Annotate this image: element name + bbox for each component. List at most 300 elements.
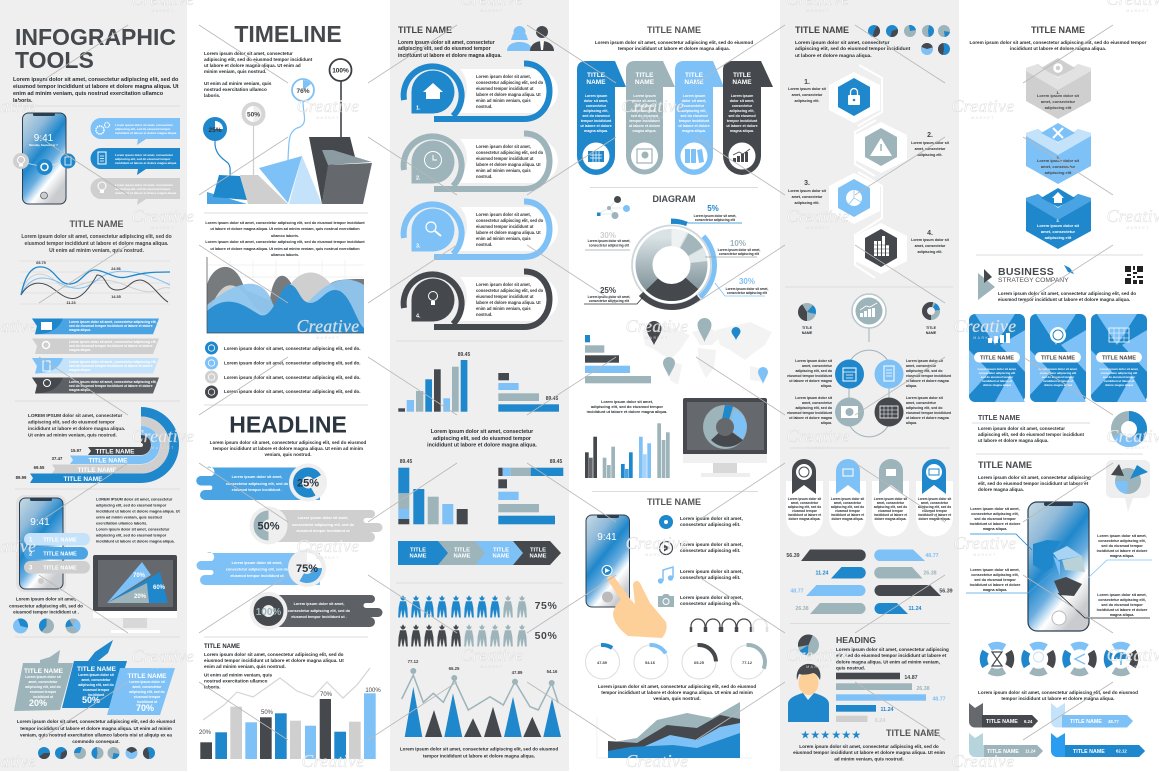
watermark text: MARKET — [806, 9, 830, 13]
ribbon list: Lorem ipsum dolor sit amet, consectetur adipiscing elit, — [69, 380, 157, 384]
watermark text: Creative — [626, 751, 688, 771]
phone with 3D pie and callouts: sed do eiusmod tempor — [1101, 603, 1143, 607]
phone with numbered menu: 2 — [29, 552, 33, 558]
business cards: Lorem ipsum dolor sit amet, — [1100, 367, 1139, 371]
vertical tab cards: dolor sit amet, — [682, 99, 706, 103]
phone with 3D pie and callouts — [966, 502, 1152, 631]
splash bars with percent donuts: eiusmod tempor incididunt ut — [296, 529, 350, 533]
icons: people — [507, 26, 554, 51]
isometric box 3 — [1026, 188, 1091, 249]
text block column 6: Lorem ipsum dolor sit amet, consectetur adipiscing elit, sed do eiusmod tempor — [970, 40, 1147, 45]
numbered step 4: nostrud. — [476, 312, 492, 317]
numbered step 2: labore et dolore magna aliqua. Ut — [476, 162, 541, 167]
numbered step 2: nostrud. — [476, 174, 492, 179]
business cards: TITLE NAME — [1102, 356, 1136, 362]
numbered step 3: eiusmod tempor incididunt ut — [476, 224, 534, 229]
network of icon circles: TITLE — [802, 326, 813, 330]
vertical tab cards: TITLE — [733, 72, 752, 79]
phone with 3D pie and callouts: incididunt ut labore et dolore — [1097, 549, 1147, 553]
phone with app icons — [13, 113, 76, 204]
hexagon steps: adipiscing elit. — [795, 99, 819, 103]
world map with pins — [642, 318, 772, 385]
text block column 4: tempor incididunt ut labore et dolore magna aliqua. — [618, 46, 730, 51]
network of icon circles: amet, consectetur — [802, 401, 833, 405]
watermark text: MARKET — [151, 9, 175, 13]
isometric box 2 — [1026, 123, 1091, 184]
trapezoid comparison bars: 56.39 — [939, 588, 953, 594]
origami banners: incididunt ut — [33, 695, 54, 699]
watermark text: Creative — [302, 751, 364, 771]
title name with text: TITLE NAME — [978, 460, 1032, 470]
chevron process arrow: NAME — [492, 554, 510, 560]
phone with 3D pie and callouts: incididunt ut labore et dolore — [970, 583, 1020, 587]
numbered step 4: consectetur adipiscing elit, sed do — [476, 288, 544, 293]
skill bars: 26.38 — [916, 686, 930, 692]
donut diagram with labels: consectetur adipiscing elit — [719, 252, 760, 256]
origami banners: 50% — [82, 695, 100, 705]
speech bubbles with text: Lorem ipsum dolor sit amet, consectetur — [115, 183, 174, 187]
concentric arc bars: 69.55 — [34, 465, 45, 470]
speech bubbles with text: Lorem ipsum dolor sit amet, consectetur — [115, 123, 174, 127]
phone with 3D pie and callouts: consectetur adipiscing elit, — [1098, 598, 1146, 602]
watermark text: MARKET — [151, 666, 175, 670]
business cards: consectetur adipiscing elit — [1101, 371, 1137, 375]
trapezoid comparison bars: 26.38 — [923, 570, 937, 576]
phone with 3D pie and callouts: magna aliqua. — [983, 527, 1007, 531]
watermark text: Creative — [132, 646, 194, 666]
watermark text: Creative — [952, 751, 1014, 771]
stars: ★ — [842, 730, 851, 741]
business logo and heading: Lorem ipsum dolor sit amet, consectetur adipiscing elit, sed do — [998, 291, 1136, 296]
business cards: dolore magna aliqua — [983, 383, 1011, 387]
numbered step 3: enim ad minim veniam, quis — [476, 236, 531, 241]
bookmark cards: eiusmod tempor — [792, 509, 818, 513]
vertical tab cards: adipiscing elit, — [730, 109, 754, 113]
numbered step 4: 4. — [416, 314, 421, 320]
intro text: laboris. — [13, 98, 33, 104]
business cards: dolore magna aliqua — [1105, 383, 1133, 387]
trapezoid comparison bars: 11.24 — [816, 570, 829, 576]
watermark text: MARKET — [806, 665, 830, 669]
phone with numbered menu — [16, 495, 90, 592]
title name with text and donut: Lorem ipsum dolor sit amet, consectetur — [978, 426, 1065, 431]
bookmark cards: incididunt ut labore et — [788, 513, 822, 517]
stacked bar chart — [498, 459, 563, 524]
phone with 3D pie and callouts: incididunt ut labore et dolore — [1097, 608, 1147, 612]
heading block with pie: HEADING — [836, 635, 876, 645]
centered text under gauges: tempor incididunt ut labore et dolore magna aliqua. Ut enim ad minim — [601, 690, 753, 695]
heading and text: bar chart: laboris. — [204, 684, 221, 690]
concentric arc bars: 15.97 — [71, 448, 82, 453]
watermark text: MARKET — [806, 226, 830, 230]
vertical tab cards: sed do eiusmod — [680, 114, 708, 118]
bar chart with trend line — [199, 668, 381, 759]
phone with 3D pie and callouts: incididunt ut labore et dolore — [970, 522, 1020, 526]
numbered step 1: 1. — [416, 106, 421, 112]
vertical tab cards: Lorem ipsum — [585, 94, 607, 98]
caption under phone: consectetur adipiscing elit, sed do — [9, 604, 83, 608]
vertical tab cards: tempor incididunt — [679, 119, 710, 123]
donut diagram with labels: 25% — [600, 286, 616, 295]
title: Timeline: TIMELINE — [234, 21, 342, 47]
watermark text: MARKET — [316, 336, 340, 340]
ribbon list: magna aliqua. — [69, 328, 91, 332]
business cards: TITLE NAME — [1041, 356, 1075, 362]
media icon list: consectetur adipiscing elit. — [680, 601, 740, 606]
stacked column chart — [398, 459, 468, 524]
intro text: eiusmod tempor incididunt ut labore et dolore magna aliqua. Ut — [13, 84, 179, 90]
splash bars with percent donuts: eiusmod tempor incididunt ut . — [291, 615, 347, 619]
hexagon steps: 2. — [927, 132, 933, 139]
network of icon circles: eiusmod tempor incididunt — [787, 374, 833, 378]
text block column 3: adipiscing elit, sed do eiusmod tempor — [398, 46, 491, 52]
business cards: consectetur adipiscing elit — [979, 371, 1015, 375]
business cards: incididunt ut labore et — [1043, 379, 1073, 383]
monitor with pyramid chart: 60% — [153, 585, 166, 591]
heading: title name column 5: TITLE NAME — [795, 25, 849, 35]
watermark text: Creative — [787, 206, 849, 226]
hexagon steps: Lorem ipsum dolor sit — [911, 238, 950, 242]
chevron process arrow — [398, 541, 561, 565]
origami banners: adipiscing elit, sed do — [25, 685, 61, 689]
bookmark cards: Lorem ipsum dolor sit — [788, 497, 822, 501]
timeline text: laboris. — [204, 93, 220, 98]
hexagon steps: adipiscing elit. — [795, 201, 819, 205]
tag labels: TITLE NAME — [1073, 749, 1105, 755]
watermark text: Creative — [952, 96, 1014, 116]
title: Infographic Tools: TOOLS — [15, 47, 94, 73]
vertical tab cards: Lorem ipsum — [633, 94, 656, 98]
chevron process arrow: NAME — [409, 554, 427, 560]
people pictogram 75 percent: 75% — [535, 600, 557, 612]
origami banners: incididunt — [88, 693, 105, 697]
bar chart with trend line: 100% — [365, 688, 381, 694]
watermark text: MARKET — [480, 9, 504, 13]
bookmark cards: amet, consectetur — [791, 501, 819, 505]
network of icon circles: Lorem ipsum dolor sit — [795, 359, 833, 363]
horizontal bar chart — [498, 373, 559, 412]
watermark text: Creative — [954, 533, 1016, 553]
numbered step 3: 3. — [416, 244, 421, 250]
phone with numbered menu: TITLE NAME — [43, 552, 77, 558]
chevron process arrow: TITLE — [493, 548, 509, 554]
phone with 3D pie and callouts: Lorem ipsum dolor sit amet, — [970, 507, 1020, 511]
watermark text: Creative — [297, 96, 359, 116]
line chart: 11.23 — [66, 301, 76, 305]
numbered step 1: consectetur adipiscing elit, sed do — [476, 80, 544, 85]
vertical tab cards: consectetur — [634, 104, 655, 108]
vertical tab cards: adipiscing elit, — [682, 109, 706, 113]
mountain chart with pins: 50% — [247, 112, 260, 118]
watermark text: MARKET — [806, 446, 830, 450]
centered text column 3: adipiscing elit, sed do eiusmod tempor — [433, 436, 531, 442]
donut diagram with labels: 5% — [707, 204, 719, 213]
centered text under gauges: veniam, quis nostrud. — [653, 696, 701, 701]
triangle chart with trend line: 54.16 — [547, 669, 558, 674]
grouped bar chart — [585, 423, 670, 478]
stars: ★ — [852, 730, 861, 741]
numbered step 1 — [404, 63, 558, 119]
origami banners: amet, consectetur — [81, 678, 111, 682]
isometric box 3: adipiscing elit — [1045, 235, 1072, 240]
media icon list: consectetur adipiscing elit. — [680, 575, 740, 580]
text block beside phone: LOREM IPSUM dolor sit amet, consectetur — [96, 498, 173, 502]
vertical tab cards: TITLE — [587, 72, 606, 79]
line chart: 14.35 — [111, 295, 121, 299]
stacked area chart — [597, 702, 752, 758]
concentric arc bars: 89.99 — [16, 475, 27, 480]
centered text above tags: tempor incididunt ut labore et dolore magna aliqua. — [1001, 696, 1115, 701]
small pies row — [13, 618, 80, 634]
chevron process arrow: TITLE — [454, 548, 470, 554]
vertical tab cards: tempor incididunt — [629, 119, 660, 123]
numbered step 4 — [404, 271, 558, 327]
business cards: incididunt ut labore et — [982, 379, 1012, 383]
caption under phone: eiusmod tempor incididunt ut . — [13, 610, 79, 614]
text block column 5: Lorem ipsum dolor sit amet, consectetur — [795, 40, 890, 46]
speech bubbles with text: incididunt ut labore et dolore magna aliqua — [115, 131, 177, 135]
timeline text: Ut enim ad minim veniam, quis — [204, 81, 272, 86]
line chart: 65.75 — [36, 261, 46, 265]
molecule dots — [597, 196, 630, 219]
business cards: dolore magna aliqua — [1044, 383, 1072, 387]
watermark text: MARKET — [645, 553, 669, 557]
splash bars with percent donuts: Lorem ipsum dolor sit amet, — [232, 561, 282, 565]
legend list: Lorem ipsum dolor sit amet, consectetur adipiscing elit, sed do. — [224, 360, 361, 366]
phone with numbered menu: TITLE NAME — [43, 566, 77, 572]
centered text under gauges: Lorem ipsum dolor sit amet, consectetur adipiscing elit, sed do eiusmod — [598, 684, 756, 689]
text block above arc: LOREM IPSUM dolor sit amet, consectetur — [28, 413, 122, 418]
phone with hand — [586, 515, 667, 638]
origami banners: 70% — [136, 703, 154, 713]
origami banners: Lorem ipsum dolor sit — [25, 675, 62, 679]
four-segment icon circles — [978, 640, 1140, 678]
hexagon steps: Lorem ipsum dolor sit — [788, 87, 827, 91]
skill bars: 6.24 — [875, 718, 885, 724]
stars: ★ — [811, 730, 820, 741]
isometric box 2: Lorem ipsum dolor sit — [1037, 158, 1080, 163]
speech bubbles with text: adipiscing elit, sed do eiusmod tempor — [115, 187, 171, 191]
network of icon circles: TITLE — [926, 326, 937, 330]
centered small text above grouped bars: adipiscing elit, sed do eiusmod tempor — [591, 404, 663, 409]
watermark text: MARKET — [973, 336, 997, 340]
text block column 5: adipiscing elit, sed do eiusmod tempor incididunt — [795, 46, 911, 52]
numbered step 2: Lorem ipsum dolor sit amet, — [476, 144, 531, 149]
intro text: enim ad minim veniam, quis nostrud exercitation ullamco — [13, 91, 164, 97]
text block beside phone: exercitation ullamco laboris. — [96, 522, 147, 526]
phone with 3D pie and callouts: consectetur adipiscing elit, — [1098, 539, 1146, 543]
footer text column 1: tempor incididunt ut labore et dolore magna aliqua. Ut enim ad minim — [20, 726, 172, 731]
vertical tab cards: Lorem ipsum — [683, 94, 705, 98]
skill bars — [836, 673, 946, 724]
centered small text above grouped bars: incididunt ut labore et dolore magna aliqua. — [587, 409, 667, 414]
text block beside phone: adipiscing elit, sed do eiusmod tempor — [96, 534, 167, 538]
watermark text: MARKET — [971, 116, 995, 120]
hexagon steps: adipiscing elit. — [918, 153, 942, 157]
footer text column 1: Lorem ipsum dolor sit amet, consectetur adipiscing elit, sed do eiusmod — [17, 719, 175, 724]
network of icon circles: Lorem ipsum dolor sit — [795, 396, 833, 400]
bookmark cards: eiusmod tempor — [878, 509, 904, 513]
panel: gray column 2 background — [390, 0, 569, 771]
watermark text: MARKET — [151, 226, 175, 230]
concentric arc bars: TITLE NAME — [96, 448, 135, 456]
network of icon circles: ut labore et dolore magna — [906, 379, 949, 383]
isometric box 2: amet, consectetur — [1041, 164, 1076, 169]
donut diagram with labels: Lorem ipsum dolor sit amet, — [726, 287, 768, 291]
concentric arc bars: TITLE NAME — [64, 476, 103, 483]
phone with hand: 9:41 — [597, 532, 617, 543]
panel: gray column 1 background — [0, 0, 187, 771]
heading: title name: TITLE NAME — [70, 219, 124, 229]
numbered step 2: enim ad minim veniam, quis — [476, 168, 531, 173]
column chart: 89.45 — [458, 352, 470, 358]
hexagon steps: Lorem ipsum dolor sit — [788, 189, 827, 193]
ribbon list: sed do eiusmod tempor incididunt ut labore et dolore — [69, 364, 153, 368]
numbered step 4: labore et dolore magna aliqua. Ut — [476, 300, 541, 305]
donut diagram with labels: consectetur adipiscing elit — [589, 244, 630, 248]
splash bars with percent donuts: consectetur adipiscing elit, sed do — [292, 523, 355, 527]
network of icon circles: aliqua. — [906, 421, 917, 425]
vertical tab cards: tempor incididunt — [581, 119, 612, 123]
vertical tab cards: sed do eiusmod — [631, 114, 658, 118]
network of icon circles: ut labore et dolore magna — [789, 416, 832, 420]
business cards: sed do eiusmod tempor — [1042, 375, 1075, 379]
heading: title name: TITLE NAME — [647, 497, 701, 507]
vertical tab cards: NAME — [586, 79, 606, 86]
concentric arc bars: 37.47 — [52, 456, 63, 461]
heading: diagram: DIAGRAM — [652, 194, 696, 204]
timeline text: adipiscing elit, sed do eiusmod tempor incididunt — [204, 57, 313, 62]
headline text: tempor incididunt ut labore et dolore magna aliqua. Ut enim ad minim — [213, 446, 363, 451]
speech bubbles with text — [91, 118, 180, 205]
origami banners: adipiscing elit, sed do — [78, 683, 114, 687]
column chart — [398, 352, 470, 412]
vertical tab cards: NAME — [732, 79, 752, 86]
splash bars with percent donuts: Lorem ipsum dolor sit amet, — [294, 602, 344, 606]
network of icon circles: Lorem ipsum dolor sit — [906, 359, 944, 363]
network of icon circles: aliqua. — [906, 384, 917, 388]
monitor with pyramid chart: 70% — [133, 573, 146, 579]
bookmark cards: dolore magna aliqua. — [875, 517, 907, 521]
watermark text: MARKET — [641, 116, 665, 120]
splash bars with percent donuts: eiusmod tempor incididunt ut — [230, 574, 284, 578]
person avatar — [788, 664, 829, 722]
gauge rings: 54.16 — [645, 660, 656, 665]
watermark text: Creative — [297, 316, 359, 336]
splash bars with percent donuts: 25% — [297, 478, 319, 490]
watermark text: MARKET — [316, 116, 340, 120]
splash bars with percent donuts: eiusmod tempor incididunt . — [232, 488, 282, 492]
splash bars with percent donuts: 100% — [256, 607, 281, 618]
bookmark cards: amet, consectetur — [921, 501, 949, 505]
splash bars with percent donuts: Lorem ipsum dolor sit amet, — [232, 475, 282, 479]
title name with text and donut: ut labore et dolore magna aliqua. — [978, 438, 1049, 443]
origami banners: Lorem ipsum dolor sit — [129, 680, 166, 684]
watermark text: Creative — [954, 316, 1016, 336]
line chart: 24.56 — [111, 267, 121, 271]
trapezoid comparison bars: 11.24 — [909, 606, 922, 612]
splash bars with percent donuts: 75% — [296, 563, 318, 575]
bookmark cards: dolore magna aliqua. — [919, 517, 951, 521]
vertical tab cards: adipiscing elit, — [632, 109, 657, 113]
centered text above area chart: ullamco laboris. — [271, 253, 299, 257]
vertical tab cards: TITLE — [685, 72, 704, 79]
bookmark cards: adipiscing elit, sed do — [918, 505, 951, 509]
dividers — [13, 106, 1143, 637]
network of icon circles: adipiscing elit, sed do — [906, 369, 943, 373]
footer text column 3: Lorem ipsum dolor sit amet, consectetur adipiscing elit, sed do eiusmod — [400, 746, 558, 752]
trapezoid comparison bars: 48.77 — [925, 553, 939, 559]
stars: ★ — [832, 730, 841, 741]
tag labels: 11.24 — [1025, 748, 1036, 754]
isometric box 1: Lorem ipsum dolor sit — [1037, 93, 1080, 98]
legend list — [205, 342, 361, 398]
watermark text: Creative — [461, 645, 523, 665]
numbered step 3 — [404, 201, 558, 257]
vertical tab cards: consectetur — [684, 104, 705, 108]
bookmark cards — [786, 459, 953, 536]
area chart — [207, 257, 364, 333]
numbered step 1: eiusmod tempor incididunt ut — [476, 86, 534, 91]
isometric box 3: amet, consectetur — [1041, 229, 1076, 234]
text block beside phone: enim ad minim veniam, quis nostrud — [96, 516, 163, 520]
stacked bar chart: 89.45 — [550, 459, 562, 465]
footer text column 1: commodo consequat. — [72, 739, 120, 744]
network of icon circles: NAME — [926, 331, 937, 335]
numbered step 1: enim ad minim veniam, quis — [476, 98, 531, 103]
donut diagram with labels — [584, 204, 768, 326]
triangle chart with trend line: 65.25 — [449, 666, 460, 671]
tag labels: 48.77 — [1108, 719, 1119, 724]
business cards — [969, 314, 1147, 402]
heading and text: bar chart: TITLE NAME — [204, 644, 240, 650]
bookmark cards: incididunt ut labore et — [918, 513, 952, 517]
vertical tab cards — [577, 61, 773, 175]
phone with numbered menu: 9:41 — [30, 517, 50, 528]
media icon list: Lorem ipsum dolor sit amet, — [680, 542, 743, 547]
concentric arc bars: TITLE NAME — [78, 467, 117, 474]
bookmark cards: eiusmod tempor — [922, 509, 948, 513]
donut diagram with labels: consectetur adipiscing elit — [695, 218, 736, 222]
heading: title name column 3: TITLE NAME — [398, 25, 452, 35]
heading block with pie — [798, 634, 949, 670]
vertical tab cards: magna aliqua. — [633, 129, 656, 133]
bookmark cards: dolore magna aliqua. — [832, 517, 864, 521]
panel: gray column 3 background — [780, 0, 959, 771]
hexagon steps: 4. — [927, 230, 933, 237]
concentric arc bars — [16, 407, 179, 483]
hexagon steps: amet, consectetur — [792, 93, 823, 97]
phone with numbered menu: TITLE NAME — [43, 538, 77, 544]
splash bars with percent donuts: Lorem ipsum dolor sit amet, — [298, 516, 348, 520]
speech bubbles with text: incididunt ut labore et dolore magna aliqua — [115, 161, 177, 165]
heading and text: bar chart: Ut enim ad minim veniam, quis — [204, 672, 272, 678]
triangle chart with trend line: 77.12 — [408, 659, 419, 664]
network of icon circles: ut labore et dolore magna — [906, 416, 949, 420]
gauge rings: 65.25 — [694, 660, 705, 665]
origami banners: TITLE NAME — [128, 673, 167, 680]
origami banners: eiusmod tempor — [83, 688, 110, 692]
vertical tab cards: Lorem ipsum — [731, 94, 753, 98]
watermark text: MARKET — [151, 446, 175, 450]
watermark text: MARKET — [645, 336, 669, 340]
ribbon list: sed do eiusmod tempor incididunt ut labore et dolore — [69, 344, 153, 348]
chevron process arrow: TITLE — [530, 548, 546, 554]
numbered step 3: labore et dolore magna aliqua. Ut — [476, 230, 541, 235]
monitor with pyramid chart: 20% — [134, 594, 147, 600]
title: Infographic Tools: INFOGRAPHIC — [15, 24, 176, 50]
footer text column 5: Lorem ipsum dolor sit amet, consectetur adipiscing elit, sed do — [799, 744, 939, 749]
